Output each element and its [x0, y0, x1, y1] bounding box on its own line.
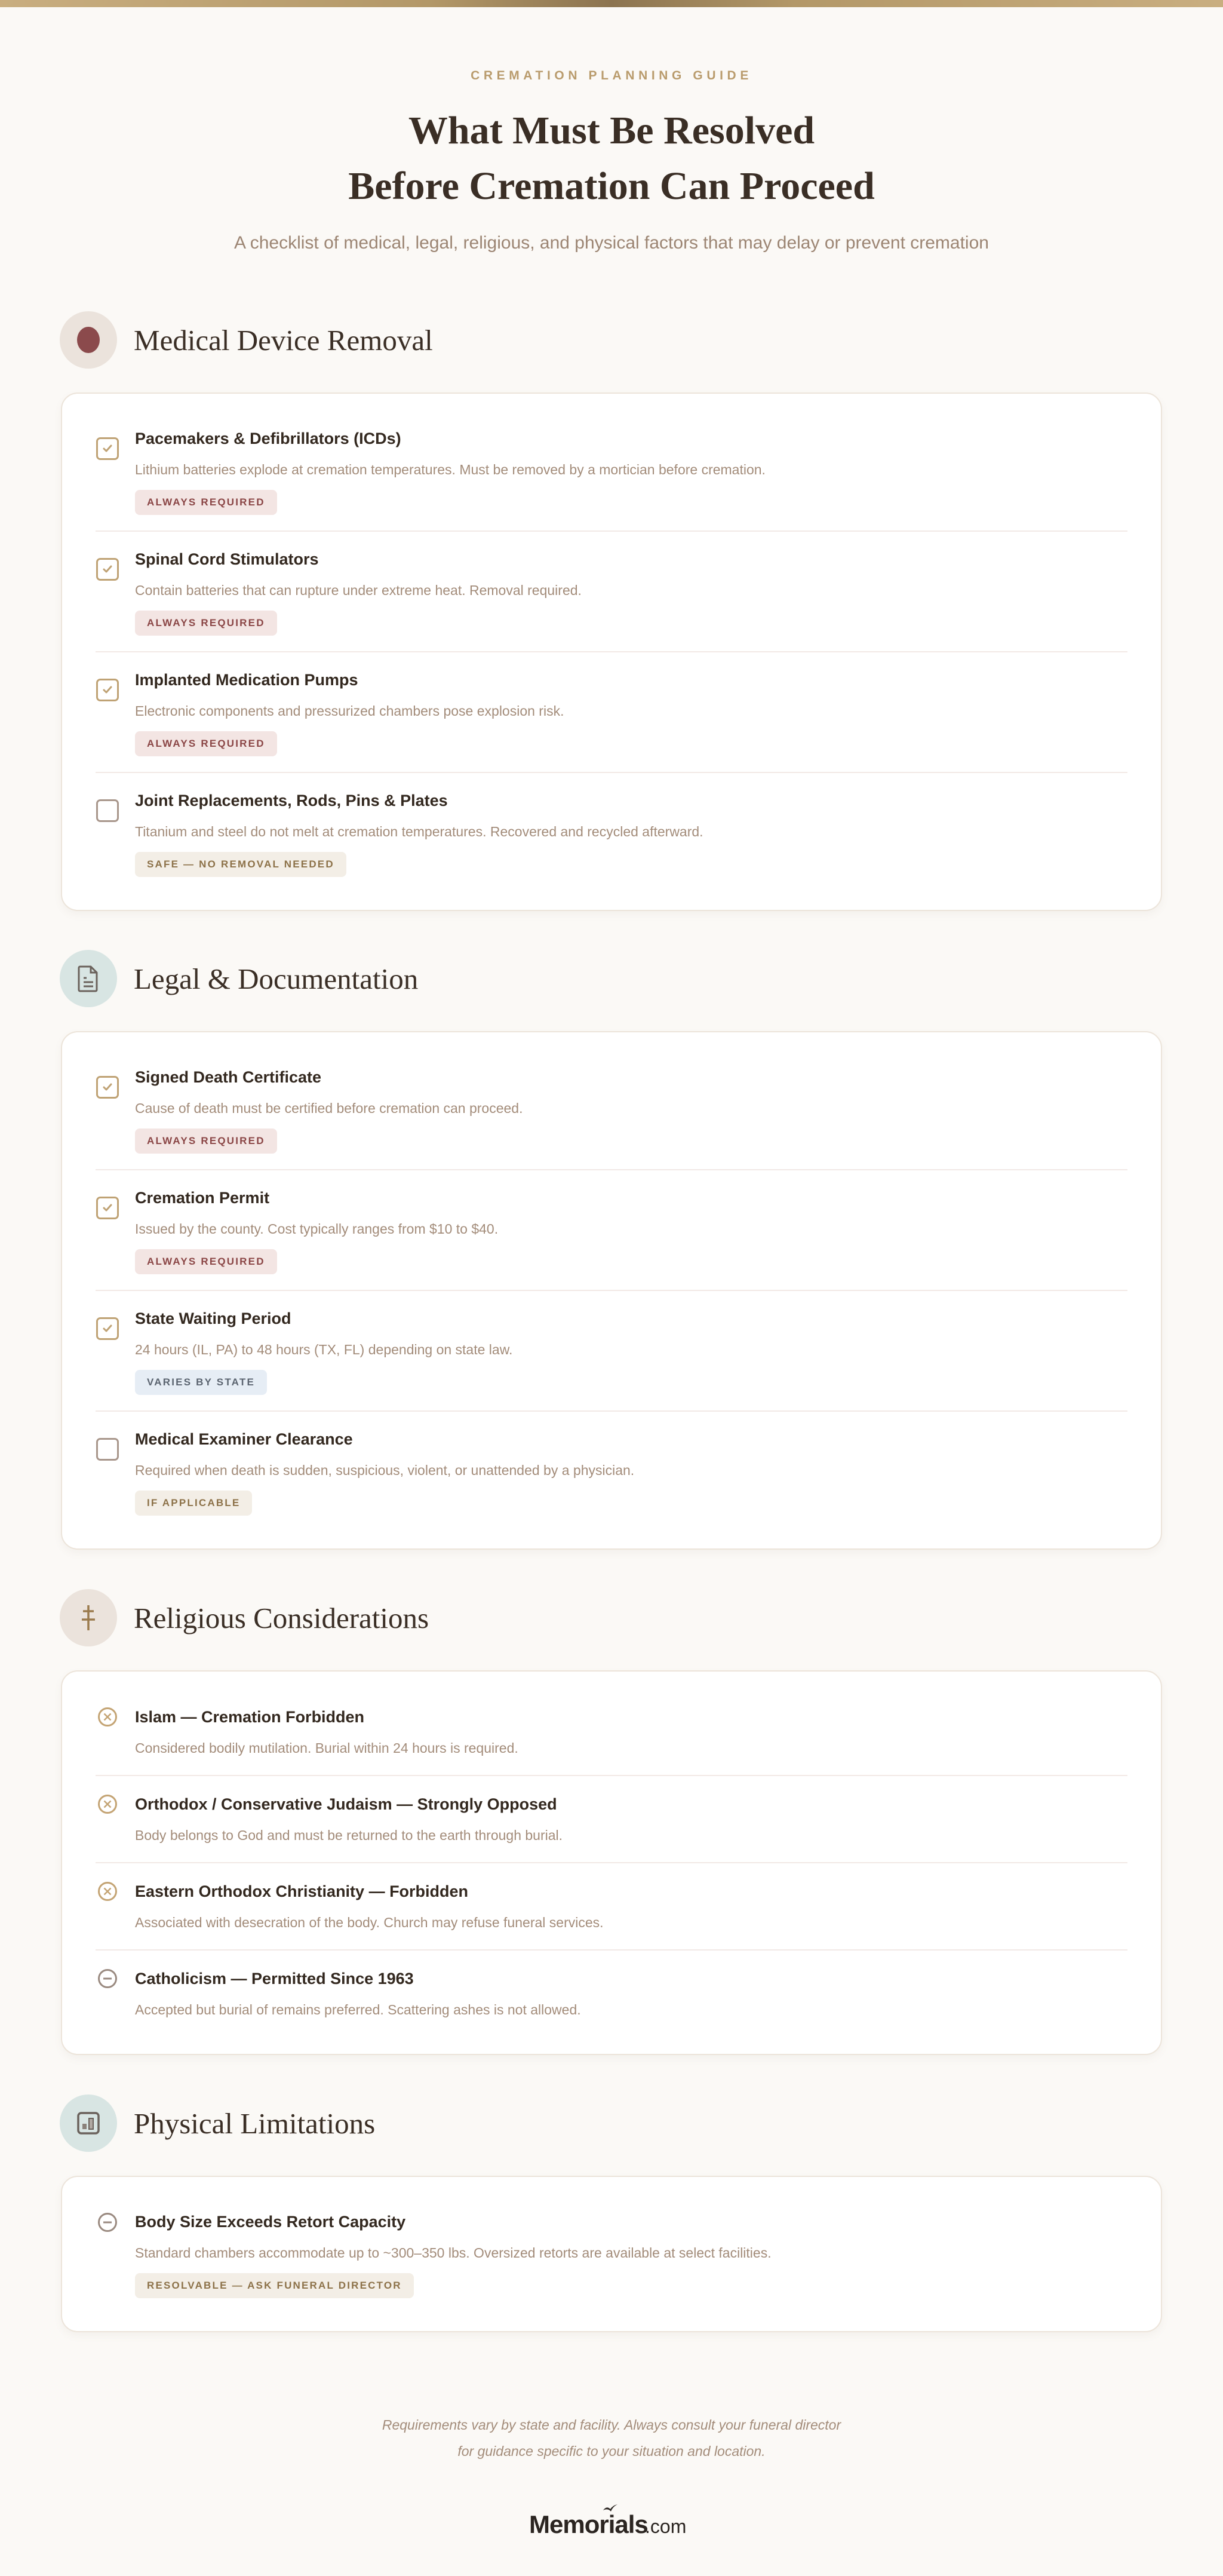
- logo: .com: [645, 2516, 686, 2537]
- eyebrow: CREMATION PLANNING GUIDE: [471, 69, 752, 82]
- item: body size: Standard chambers accommodate up to ~300–350 lbs. Oversized retorts are available at select facilities.: [135, 2245, 772, 2261]
- panel: medical devices: [61, 392, 1162, 911]
- title: Before Cremation Can Proceed: [348, 164, 875, 208]
- item: medication pumps: [96, 652, 1127, 773]
- item: waiting period: State Waiting Period: [135, 1310, 291, 1327]
- item: Islam: [96, 1689, 1127, 1776]
- item: medical examiner: Medical Examiner Clearance: [135, 1430, 353, 1448]
- item: Islam: Considered bodily mutilation. Burial within 24 hours is required.: [135, 1740, 518, 1756]
- item: death certificate: Cause of death must be certified before cremation can proceed.: [135, 1100, 523, 1116]
- item: medication pumps: Electronic components and pressurized chambers pose explosion risk.: [135, 703, 564, 719]
- item: Eastern Orthodox: [96, 1863, 1127, 1951]
- section heading: Religious Considerations: [60, 1589, 429, 1646]
- item: Eastern Orthodox: Eastern Orthodox Christianity — Forbidden: [135, 1882, 468, 1900]
- item: spinal stimulators: Contain batteries that can rupture under extreme heat. Removal required.: [135, 582, 582, 598]
- item: medication pumps: ALWAYS REQUIRED: [147, 738, 265, 749]
- icon: document: [60, 950, 117, 1007]
- panel: religious: [61, 1670, 1162, 2055]
- item: death certificate: [96, 1050, 1127, 1170]
- item: Catholicism: Accepted but burial of remains preferred. Scattering ashes is not allowed.: [135, 2002, 581, 2017]
- item: pacemakers: Lithium batteries explode at cremation temperatures. Must be removed by a mortician before cremation.: [135, 462, 766, 477]
- icon: double cross: [60, 1589, 117, 1646]
- item: pacemakers: [96, 411, 1127, 532]
- item: waiting period: VARIES BY STATE: [147, 1376, 255, 1388]
- item: joint replacements: [96, 792, 703, 877]
- footer note: Requirements vary by state and facility. Always consult your funeral director: [382, 2417, 841, 2433]
- item: cremation permit: Cremation Permit: [135, 1189, 269, 1207]
- item: medical examiner: IF APPLICABLE: [147, 1497, 240, 1508]
- item: cremation permit: [96, 1170, 1127, 1291]
- item: spinal stimulators: ALWAYS REQUIRED: [147, 617, 265, 628]
- item: body size: [98, 2213, 772, 2298]
- item: Judaism: Body belongs to God and must be returned to the earth through burial.: [135, 1827, 563, 1843]
- item: Catholicism: [98, 1969, 581, 2017]
- panel: legal: [61, 1031, 1162, 1550]
- section heading: Religious Considerations: Religious Considerations: [134, 1601, 429, 1634]
- item: pacemakers: ALWAYS REQUIRED: [147, 496, 265, 508]
- item: medication pumps: Implanted Medication Pumps: [135, 671, 358, 689]
- footer note: [382, 2417, 841, 2459]
- item: body size: Body Size Exceeds Retort Capacity: [135, 2213, 405, 2231]
- item: death certificate: Signed Death Certificate: [135, 1068, 321, 1086]
- title: What Must Be Resolved: [408, 109, 815, 152]
- item: waiting period: 24 hours (IL, PA) to 48 hours (TX, FL) depending on state law.: [135, 1342, 512, 1357]
- item: joint replacements: Joint Replacements, Rods, Pins & Plates: [135, 792, 448, 809]
- item: joint replacements: Titanium and steel do not melt at cremation temperatures. Recovered and recycled afterward.: [135, 824, 703, 839]
- item: Judaism: [96, 1776, 1127, 1863]
- panel: physical: [61, 2176, 1162, 2332]
- section heading: Legal & Documentation: [60, 950, 418, 1007]
- icon: chart box: [60, 2094, 117, 2152]
- item: waiting period: [96, 1291, 1127, 1412]
- subtitle: A checklist of medical, legal, religious, and physical factors that may delay or prevent cremation: [234, 233, 989, 253]
- logo: [529, 2504, 686, 2537]
- footer note: for guidance specific to your situation and location.: [457, 2443, 766, 2459]
- item: Eastern Orthodox: Associated with desecration of the body. Church may refuse funeral services.: [135, 1915, 604, 1930]
- section heading: Legal & Documentation: Legal & Documentation: [134, 962, 418, 995]
- item: cremation permit: ALWAYS REQUIRED: [147, 1256, 265, 1267]
- item: spinal stimulators: Spinal Cord Stimulators: [135, 550, 319, 568]
- item: medical examiner: Required when death is sudden, suspicious, violent, or unattended by a physician.: [135, 1462, 634, 1478]
- title: [348, 109, 875, 208]
- item: medical examiner: [96, 1430, 634, 1516]
- item: joint replacements: SAFE — NO REMOVAL NEEDED: [147, 858, 334, 870]
- section heading: Medical Device Removal: [60, 311, 433, 369]
- item: pacemakers: Pacemakers & Defibrillators (ICDs): [135, 430, 401, 447]
- item: death certificate: ALWAYS REQUIRED: [147, 1135, 265, 1146]
- item: Catholicism: Catholicism — Permitted Since 1963: [135, 1970, 414, 1988]
- section heading: Medical Device Removal: Medical Device Removal: [134, 324, 433, 356]
- item: Islam: Islam — Cremation Forbidden: [135, 1708, 364, 1726]
- section heading: Physical Limitations: [60, 2094, 375, 2152]
- item: spinal stimulators: [96, 532, 1127, 652]
- item: Judaism: Orthodox / Conservative Judaism — Strongly Opposed: [135, 1795, 557, 1813]
- icon: medical dot: [60, 311, 117, 369]
- item: cremation permit: Issued by the county. Cost typically ranges from $10 to $40.: [135, 1221, 498, 1237]
- section heading: Physical Limitations: Physical Limitations: [134, 2106, 375, 2140]
- item: body size: RESOLVABLE — ASK FUNERAL DIRECTOR: [147, 2280, 402, 2291]
